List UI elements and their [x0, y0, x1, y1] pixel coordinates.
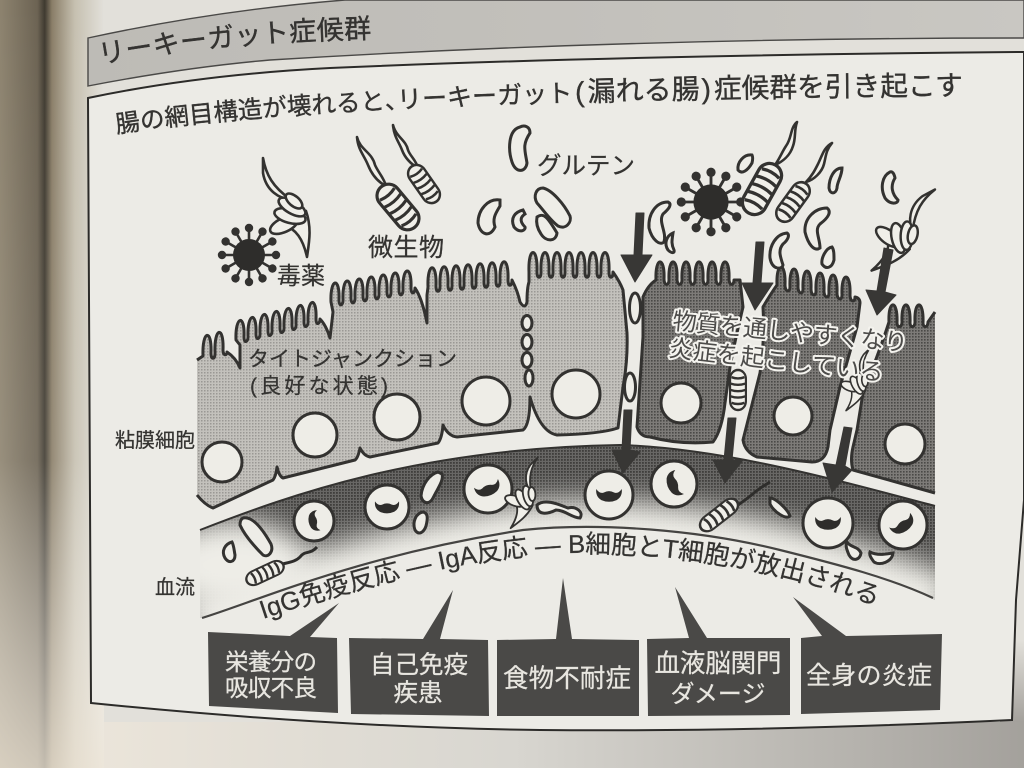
label: blood flow: 血流	[155, 576, 195, 599]
box: malabsorption: 栄養分の	[225, 649, 317, 675]
damaged cell B	[743, 267, 860, 462]
icon: virus right	[677, 168, 745, 236]
title text: リーキーガット症候群	[102, 15, 370, 64]
box: autoimmune: 自己免疫	[370, 651, 468, 679]
box: malabsorption: 吸収不良	[225, 675, 317, 701]
immune response curved text: IgG免疫反応 — IgA反応 — B細胞とT細胞が放出される	[260, 531, 877, 620]
cell nuclei	[202, 370, 925, 482]
blood vessel band	[160, 445, 945, 625]
labels	[115, 152, 635, 599]
damaged cell C	[852, 305, 935, 493]
subtitle: 腸の網目構造が壊れると、リーキーガット(漏れる腸)症候群を引き起こす	[116, 72, 961, 135]
gluten particles	[223, 126, 898, 564]
box: systemic inflammation	[793, 597, 942, 714]
viruses	[218, 168, 745, 286]
title band	[87, 0, 1024, 87]
inflamed mucosal cells	[637, 262, 935, 493]
box: autoimmune	[349, 590, 489, 716]
coiled flagellate microbes	[263, 158, 956, 529]
box: systemic inflammation: 全身の炎症	[806, 662, 932, 690]
label: good condition: (良好な状態)	[250, 375, 388, 398]
callout: inflamed text: 炎症を起こしている	[667, 335, 885, 387]
label: gluten: グルテン	[537, 152, 635, 180]
tight junction beads	[522, 293, 640, 401]
arrows into the gut lining	[612, 213, 896, 492]
striped bacteria	[244, 122, 832, 588]
damaged cell A	[637, 262, 743, 443]
box: blood-brain barrier: ダメージ	[670, 681, 766, 708]
box: malabsorption	[208, 603, 339, 713]
box: food intolerance	[497, 578, 639, 716]
box: food intolerance: 食物不耐症	[503, 665, 631, 693]
icon: virus left	[218, 224, 280, 286]
callout: inflamed text: 物質を通しやすくなり	[671, 308, 909, 357]
healthy mucosal cells	[197, 252, 627, 508]
label: microbes: 微生物	[368, 234, 444, 262]
box: blood-brain barrier	[647, 587, 790, 716]
blood cells	[294, 461, 927, 549]
box: autoimmune: 疾患	[394, 679, 442, 707]
label: mucosal cells: 粘膜細胞	[115, 429, 195, 452]
label: tight junction: タイトジャンクション	[248, 348, 457, 371]
callout: inflamed text	[667, 308, 909, 387]
symptom boxes	[208, 578, 942, 716]
box: blood-brain barrier: 血液脳関門	[654, 650, 782, 678]
label: toxin: 毒薬	[277, 263, 325, 290]
